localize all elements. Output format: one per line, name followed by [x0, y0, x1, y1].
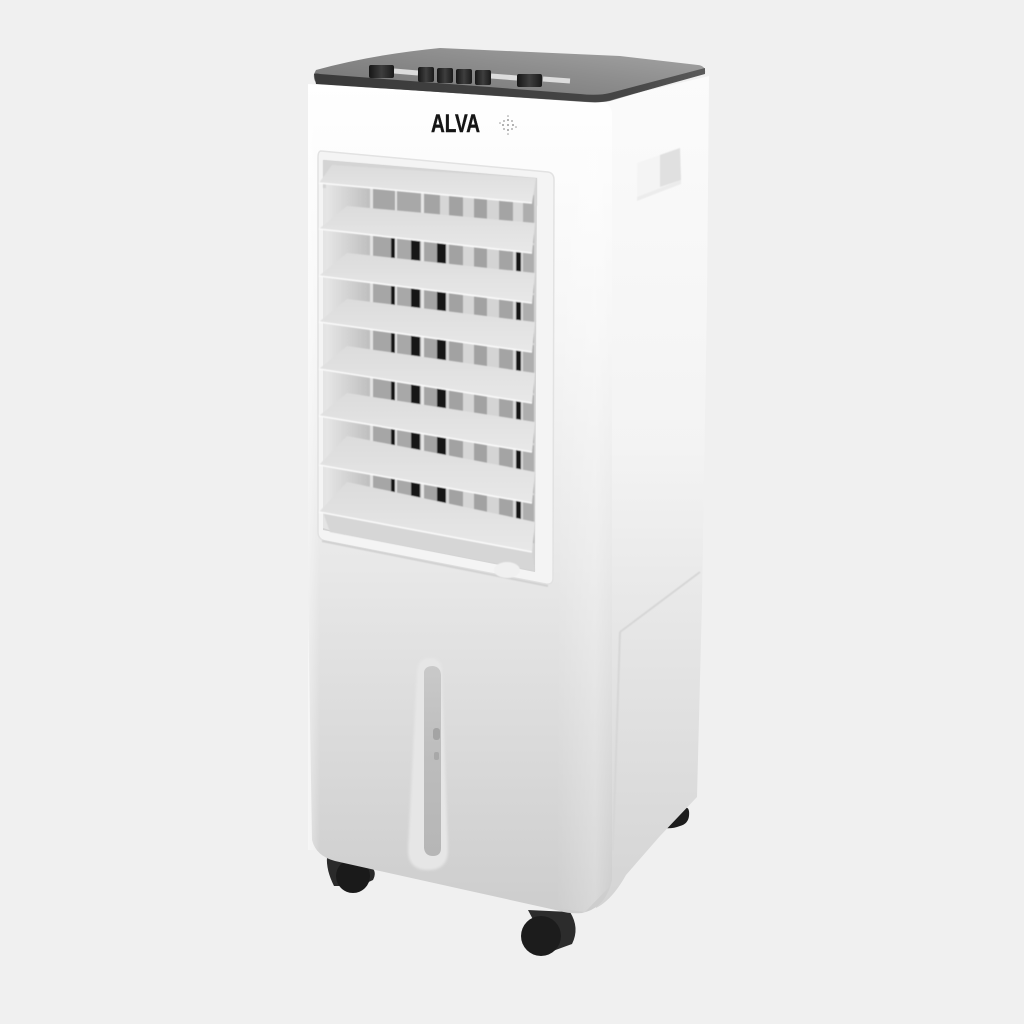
- bottom cavity: [323, 512, 535, 571]
- louver 5: [319, 346, 535, 403]
- band 4: [326, 317, 534, 393]
- caster: front right: [521, 910, 576, 956]
- band 2: [326, 223, 534, 293]
- top lid with control knobs: [314, 48, 705, 102]
- louver adjustment tab: [494, 562, 520, 578]
- side face: [596, 76, 709, 908]
- louver front edges: [319, 183, 532, 552]
- band 5: [326, 364, 534, 443]
- louver 4: [319, 299, 535, 352]
- side carry handle: [637, 148, 681, 201]
- grille interior and louvers: [319, 160, 537, 571]
- caster: rear right: [665, 808, 689, 828]
- louver 2: [319, 206, 535, 253]
- band 3: [326, 270, 534, 343]
- logo: ALVA: ALVA: [431, 110, 480, 138]
- band 7: [326, 458, 534, 543]
- cooler body: [308, 76, 709, 913]
- water level window: [408, 658, 448, 870]
- left edge highlight: [308, 90, 320, 850]
- band 1: [326, 176, 534, 243]
- louver 7: [319, 436, 535, 503]
- caster: front left: [327, 856, 375, 893]
- sensor dots: [499, 115, 517, 135]
- louver 6: [319, 393, 535, 452]
- knobs: [369, 65, 542, 87]
- top cavity: [323, 160, 537, 206]
- rounded corner highlight: [556, 100, 612, 912]
- louver 8: [319, 482, 535, 552]
- lower side panel groove: [613, 572, 700, 850]
- band 6: [326, 411, 534, 493]
- louver 1: [319, 165, 536, 203]
- grille frame: [318, 151, 554, 586]
- front face: [308, 84, 612, 913]
- louver 3: [319, 253, 535, 303]
